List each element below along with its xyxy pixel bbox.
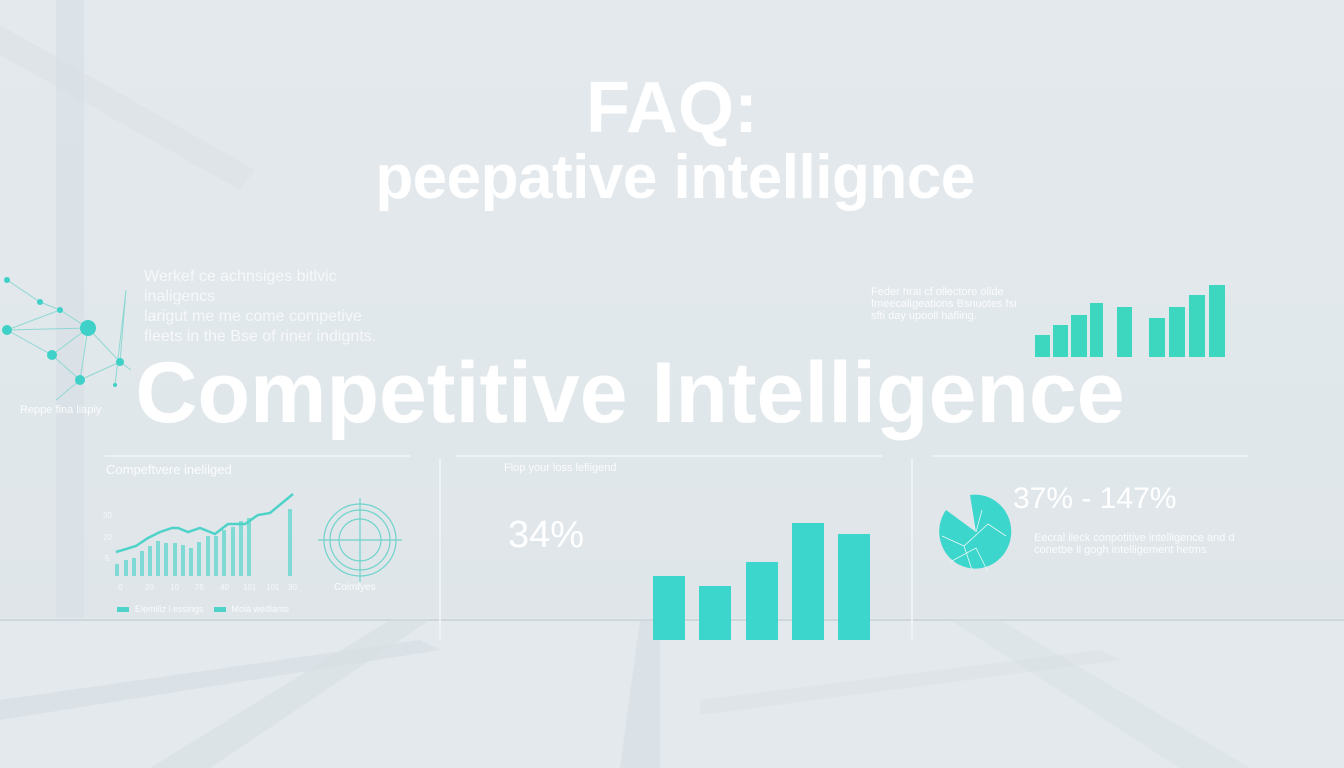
line bar chart: 10 — [170, 583, 179, 592]
stat 34%: 34% — [508, 514, 584, 556]
panel dividers — [105, 455, 1248, 640]
text block left: larigut me me come competive fleets in the Bse of riner indignts. — [144, 308, 376, 345]
legend: Elemiliz l essings Mola wedlants — [135, 604, 289, 614]
line bar chart: 101 — [243, 583, 257, 592]
line bar chart: 20 — [145, 583, 154, 592]
text block right: Feder hral cf ollectore ollde fmeecaligeations Bsnuotes fsi sfti day upooll hafling. — [871, 286, 1017, 322]
subtitle: peepative intellignce — [375, 143, 975, 212]
line bar chart — [103, 493, 297, 592]
panel: right — [939, 482, 1235, 572]
line bar chart: 0 — [118, 583, 123, 592]
radial caption: Coimfyes — [334, 582, 376, 593]
line bar chart: 30 — [288, 583, 297, 592]
panel: middle — [504, 462, 870, 640]
line bar chart: 101 — [266, 583, 280, 592]
bar chart top right — [1035, 285, 1225, 357]
panel heading: Compeftvere inelilged — [106, 462, 232, 477]
panel: left chart — [103, 462, 402, 614]
main heading: Competitive Intelligence — [135, 345, 1125, 441]
text block left — [144, 268, 376, 345]
line bar chart: 75 — [195, 583, 204, 592]
panel heading: Flop your loss lefiigend — [504, 462, 617, 474]
icon: pie — [939, 494, 1012, 572]
title: FAQ: — [586, 68, 758, 148]
description: Eecral ileck conpotitive intelligence and d conetbe il gogh intelligement hetms — [1034, 532, 1235, 556]
icon: radial chart — [318, 498, 402, 582]
line bar chart: 30 — [103, 511, 112, 520]
icon: network — [2, 277, 132, 400]
line bar chart: 40 — [220, 583, 229, 592]
network caption: Reppe fina liapiy — [20, 404, 101, 416]
stat range: 37% - 147% — [1013, 482, 1176, 515]
line bar chart: 20 — [103, 533, 112, 542]
line bar chart: 5 — [105, 554, 110, 563]
text block left: Werkef ce achnsiges bitlvic inaligencs — [144, 268, 337, 305]
bar chart middle — [653, 523, 870, 640]
